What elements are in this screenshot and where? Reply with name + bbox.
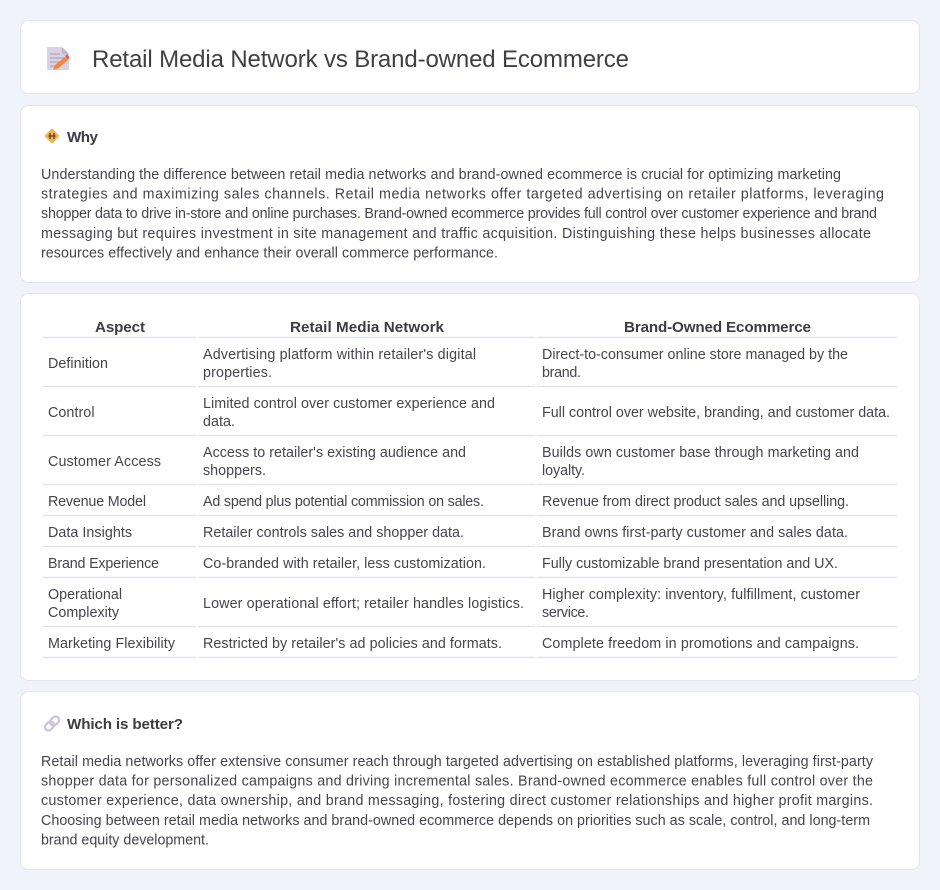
row: marketing flexibility: Complete freedom in promotions and campaigns. bbox=[542, 636, 859, 652]
table header row: Brand-Owned Ecommerce bbox=[624, 319, 811, 336]
panel: why bbox=[20, 106, 920, 282]
row: control: Full control over website, branding, and customer data. bbox=[542, 405, 890, 421]
row: definition bbox=[48, 347, 848, 381]
row: control: data. bbox=[203, 414, 235, 430]
table header row: Aspect bbox=[95, 319, 145, 336]
text block: why paragraph: shopper data to drive in-store and online purchases. Brand-owned ecommerce provides full control over customer experience and brand bbox=[41, 206, 877, 222]
heading: why: Why bbox=[67, 129, 99, 146]
row: revenue model: Revenue from direct product sales and upselling. bbox=[542, 494, 849, 510]
row: marketing flexibility: Marketing Flexibility bbox=[48, 636, 176, 652]
row: brand experience bbox=[48, 556, 838, 572]
text block: why paragraph: resources effectively and enhance their overall commerce performance. bbox=[41, 245, 498, 261]
row: operational complexity: Higher complexity: inventory, fulfillment, customer bbox=[542, 587, 860, 603]
row: marketing flexibility bbox=[48, 636, 859, 652]
row: customer access: shoppers. bbox=[203, 463, 266, 479]
icon: document with pencil bbox=[47, 47, 70, 70]
text block: why paragraph bbox=[41, 167, 884, 261]
row: marketing flexibility: Restricted by retailer's ad policies and formats. bbox=[203, 636, 502, 652]
panel: comparison table bbox=[20, 294, 920, 680]
table header row: Retail Media Network bbox=[290, 319, 445, 336]
text block: which is better paragraph: customer experience, data ownership, and brand messaging, fostering direct customer relationships and higher profit margins. bbox=[41, 793, 873, 809]
row: customer access: loyalty. bbox=[542, 463, 585, 479]
table header row bbox=[95, 319, 811, 336]
row: operational complexity: service. bbox=[542, 605, 589, 621]
text block: which is better paragraph bbox=[41, 754, 874, 848]
text block: which is better paragraph: brand equity development. bbox=[41, 832, 209, 848]
row: definition: Direct-to-consumer online store managed by the bbox=[542, 347, 848, 363]
row: data insights: Brand owns first-party customer and sales data. bbox=[542, 525, 848, 541]
row: definition: Definition bbox=[48, 356, 108, 372]
icon: warning diamond bbox=[44, 128, 60, 144]
row: definition: brand. bbox=[542, 365, 581, 381]
text block: why paragraph: messaging but requires investment in site management and traffic acquisition. Distinguishing these helps businesses allocate bbox=[41, 226, 871, 242]
row: customer access: Builds own customer base through marketing and bbox=[542, 445, 859, 461]
row: brand experience: Fully customizable brand presentation and UX. bbox=[542, 556, 838, 572]
text block: which is better paragraph: shopper data for personalized campaigns and driving incremental sales. Brand-owned ecommerce enables full control over the bbox=[41, 774, 873, 790]
panel: title header bbox=[20, 20, 920, 94]
row: customer access: Customer Access bbox=[48, 454, 161, 470]
row: control bbox=[48, 396, 890, 430]
row: control: Limited control over customer experience and bbox=[203, 396, 495, 412]
row: data insights bbox=[48, 525, 848, 541]
row: customer access bbox=[48, 445, 859, 479]
text block: why paragraph: strategies and maximizing sales channels. Retail media networks offer targeted advertising on retailer platforms, leveraging bbox=[41, 187, 884, 203]
row: operational complexity: Lower operational effort; retailer handles logistics. bbox=[203, 596, 524, 612]
row: definition: properties. bbox=[203, 365, 272, 381]
text block: which is better paragraph: Retail media networks offer extensive consumer reach through targeted advertising on established platforms, leveraging first-party bbox=[41, 754, 874, 770]
heading: which is better: Which is better? bbox=[67, 716, 183, 733]
row: brand experience: Co-branded with retailer, less customization. bbox=[203, 556, 486, 572]
row: revenue model: Ad spend plus potential commission on sales. bbox=[203, 494, 484, 510]
row: customer access: Access to retailer's existing audience and bbox=[203, 445, 466, 461]
row: data insights: Data Insights bbox=[48, 525, 132, 541]
title: Retail Media Network vs Brand-owned Ecommerce bbox=[92, 46, 629, 73]
row: revenue model: Revenue Model bbox=[48, 494, 146, 510]
row: control: Control bbox=[48, 405, 94, 421]
row: operational complexity: Operational bbox=[48, 587, 122, 603]
panel: which is better bbox=[20, 692, 920, 870]
text block: why paragraph: Understanding the difference between retail media networks and brand-owned ecommerce is crucial for optimizing marketing bbox=[41, 167, 841, 183]
row: operational complexity: Complexity bbox=[48, 605, 120, 621]
icon: chain link bbox=[43, 715, 61, 732]
row: data insights: Retailer controls sales and shopper data. bbox=[203, 525, 464, 541]
row: brand experience: Brand Experience bbox=[48, 556, 159, 572]
text block: which is better paragraph: Choosing between retail media networks and brand-owned ecommerce depends on priorities such as scale, control, and long-term bbox=[41, 813, 870, 829]
row: definition: Advertising platform within retailer's digital bbox=[203, 347, 476, 363]
row: revenue model bbox=[48, 494, 849, 510]
row: operational complexity bbox=[48, 587, 860, 621]
